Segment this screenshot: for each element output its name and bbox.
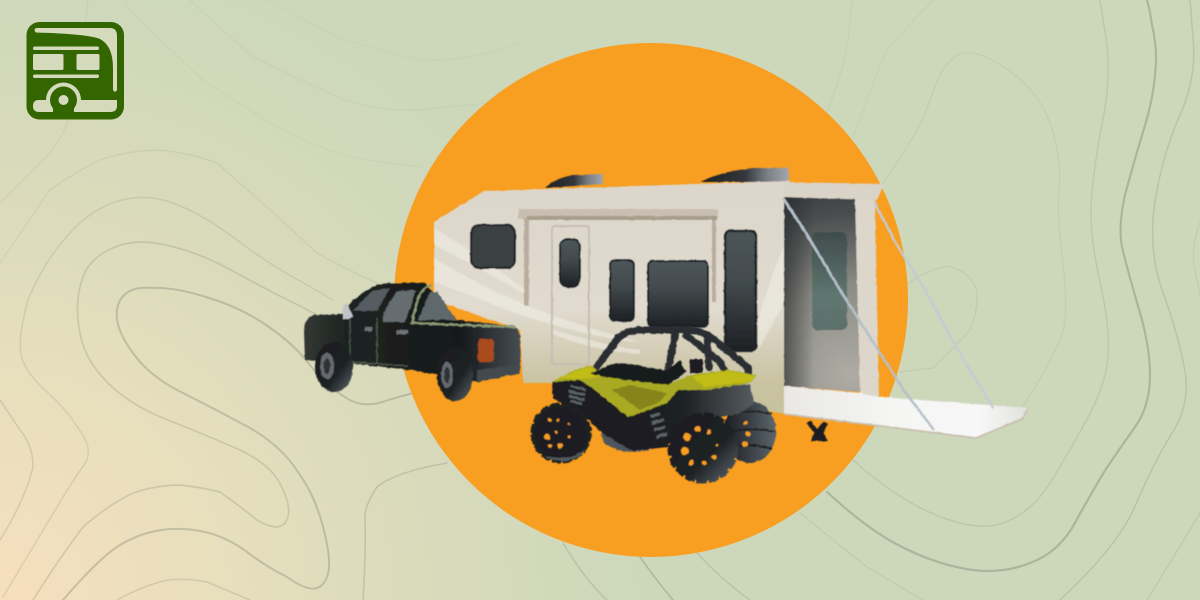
door seams	[350, 318, 408, 366]
rear seat	[690, 359, 703, 373]
interior door window	[812, 232, 847, 330]
shock: front	[569, 386, 586, 404]
window: door	[560, 239, 580, 287]
door handles	[365, 329, 408, 332]
slide-out header	[783, 182, 884, 200]
side-by-side UTV	[532, 330, 776, 481]
roof vent: rear	[701, 168, 789, 182]
mirror	[343, 304, 353, 319]
window: tall	[725, 231, 756, 351]
window: front cap	[471, 225, 515, 268]
ramp cable: right	[874, 202, 993, 408]
logo icon: camper trailer badge	[26, 22, 124, 120]
landing jack	[807, 421, 828, 441]
rear window	[418, 292, 456, 320]
pickup truck	[304, 283, 520, 401]
rear bumper	[477, 364, 520, 382]
cab side windows	[353, 288, 390, 311]
window: square	[648, 261, 708, 327]
yellow body	[552, 365, 757, 417]
front left wheel	[532, 404, 590, 462]
rear right wheel	[724, 401, 776, 463]
window: narrow	[610, 260, 634, 321]
trailer body	[434, 181, 790, 414]
taillight	[478, 339, 494, 362]
roof vent: front	[545, 174, 603, 188]
front wheel	[315, 342, 353, 392]
green pillar and bed rail	[410, 285, 515, 327]
ramp lower edge	[784, 409, 1028, 438]
loading ramp	[784, 386, 1028, 438]
awning	[518, 209, 718, 306]
seats	[590, 360, 686, 385]
slide-out dark interior	[784, 197, 860, 392]
slide-out side frame	[855, 198, 879, 398]
body swoosh stripes	[434, 228, 786, 354]
shock: middle	[651, 414, 667, 437]
roll cage	[593, 330, 748, 384]
rear underbody	[601, 416, 665, 452]
ramp cable: left	[783, 198, 934, 430]
fifth wheel trailer	[434, 168, 1028, 441]
rear wheel	[437, 347, 473, 401]
chassis	[552, 378, 754, 451]
orange circle	[394, 43, 908, 557]
front right wheel	[670, 415, 736, 481]
bright upper rim	[556, 366, 756, 387]
truck cab and bed	[304, 283, 520, 382]
entry door	[552, 226, 589, 364]
hood panel	[612, 385, 667, 410]
